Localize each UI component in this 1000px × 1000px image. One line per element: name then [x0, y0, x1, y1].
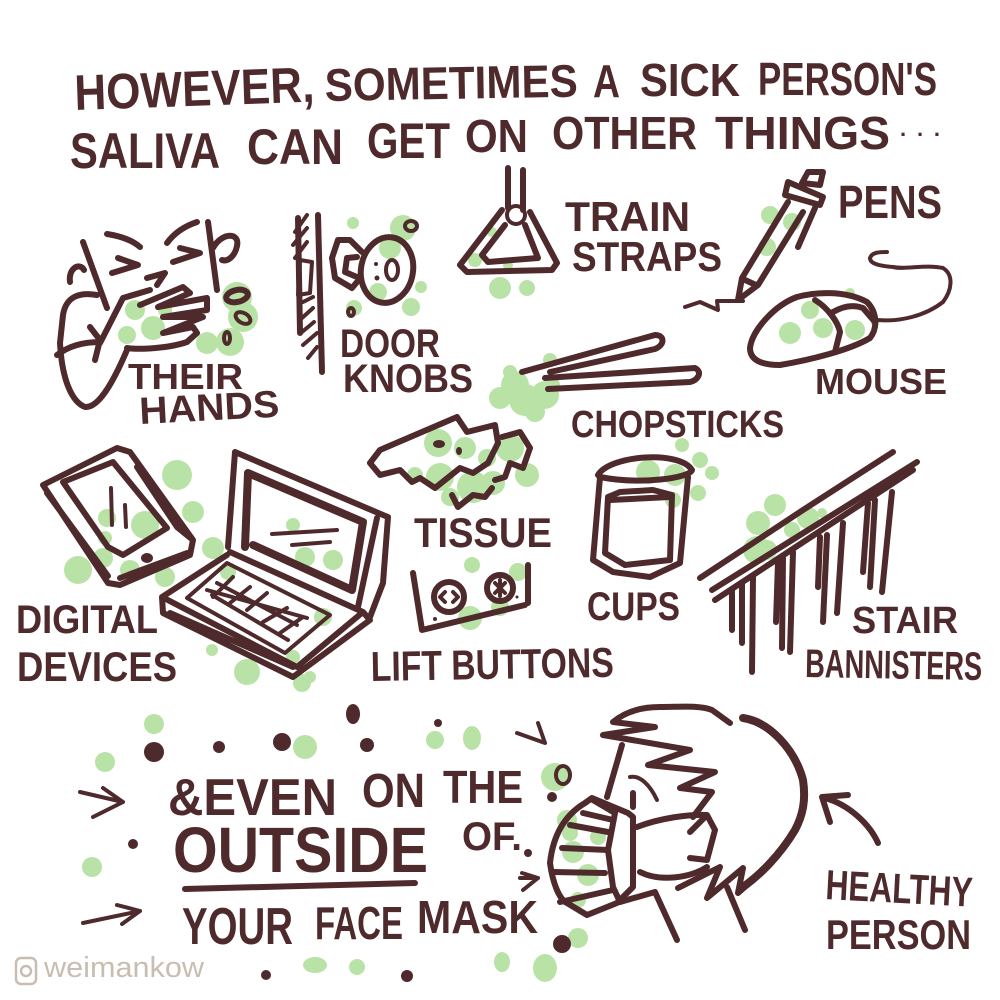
label: DEVICES — [17, 643, 177, 690]
mask message: FACE — [315, 897, 403, 949]
label: PENS — [838, 176, 942, 228]
icon: laptop — [162, 452, 388, 692]
label: CUPS — [587, 585, 680, 629]
healthy person label: PERSON — [826, 911, 971, 958]
icon: pen — [685, 172, 942, 310]
label: CHOPSTICKS — [571, 404, 784, 446]
label: TISSUE — [414, 509, 552, 556]
healthy person label — [825, 861, 974, 958]
mask message: YOUR — [182, 898, 293, 956]
title: HOWEVER, — [73, 57, 315, 121]
mask message: ON — [362, 765, 425, 818]
icon: tablet device — [16, 448, 204, 690]
mask message: THE — [443, 761, 523, 813]
title — [70, 53, 940, 179]
icon: chopsticks — [489, 335, 784, 446]
title: CAN — [247, 119, 343, 175]
label: MOUSE — [815, 361, 947, 402]
healthy person with mask — [550, 707, 804, 940]
mask message: OF. — [462, 815, 522, 859]
label: DIGITAL — [16, 598, 158, 642]
title: SALIVA — [70, 123, 220, 179]
mask message: MASK — [417, 891, 538, 943]
icon: stair bannisters — [700, 452, 983, 689]
label: DOOR — [340, 322, 440, 366]
title: PERSON'S — [758, 53, 937, 105]
label: TRAIN — [565, 193, 690, 240]
title: OTHER — [552, 107, 697, 159]
title: SOMETIMES — [324, 55, 578, 111]
icon: door knob — [293, 215, 473, 401]
title: GET — [367, 113, 450, 169]
arrow to healthy person — [822, 795, 878, 843]
label: KNOBS — [343, 357, 473, 401]
title: THINGS — [715, 107, 890, 159]
arrows pointing to mask — [80, 723, 545, 924]
label: LIFT BUTTONS — [370, 639, 614, 690]
credit: weimankow: weimankow — [43, 952, 205, 984]
title: ON — [465, 110, 528, 162]
title: SICK — [640, 54, 740, 106]
label: THEIR — [128, 356, 243, 397]
icon: hands with germs — [57, 222, 280, 433]
icon: train strap — [460, 168, 722, 299]
label: STAIR — [852, 600, 958, 642]
mask message: &EVEN — [168, 769, 337, 827]
title: ... — [900, 116, 940, 141]
icon: cup — [587, 438, 719, 629]
icon: lift buttons — [370, 557, 614, 690]
bottom droplets — [82, 704, 588, 982]
title: A — [593, 55, 620, 107]
mask message — [168, 761, 538, 956]
mask message: OUTSIDE — [173, 814, 428, 886]
icon: tissue — [370, 417, 552, 556]
label: HANDS — [138, 384, 280, 433]
icon: computer mouse — [750, 252, 951, 402]
label: STRAPS — [572, 233, 722, 280]
